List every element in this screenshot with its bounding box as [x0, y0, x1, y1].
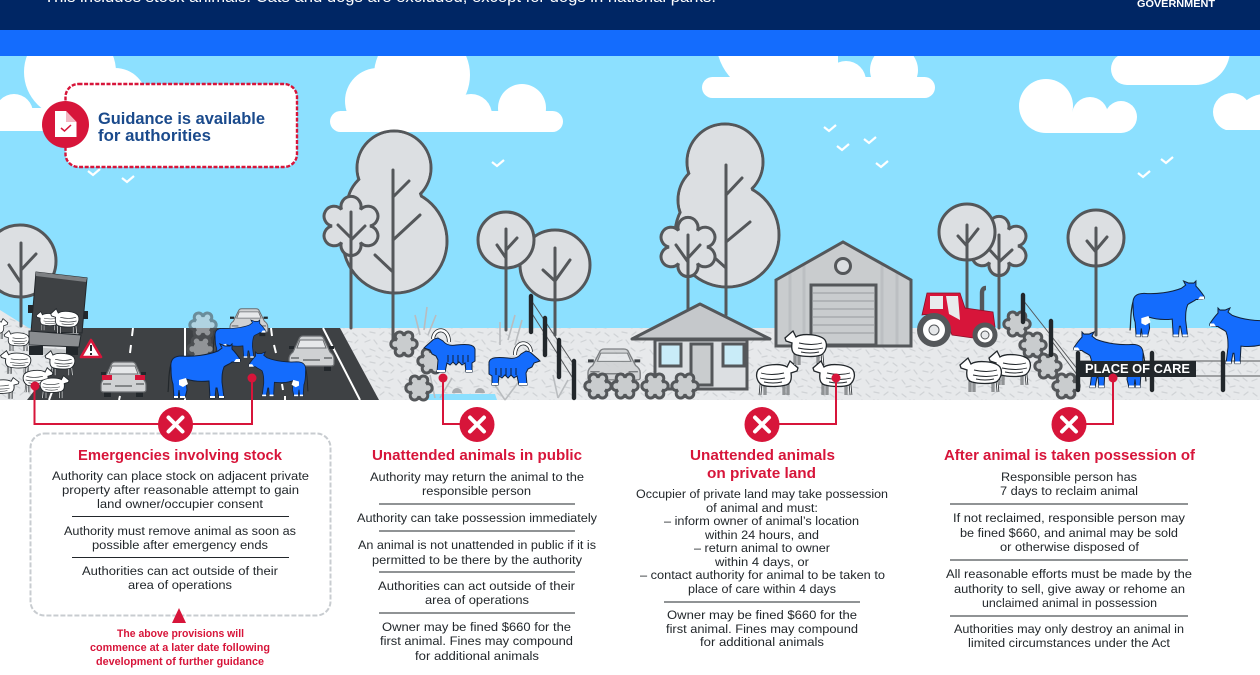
body text: Owner may be fined $660 for the: [667, 608, 857, 622]
body text: Authorities may only destroy an animal in: [954, 622, 1184, 636]
body text: [52, 469, 309, 592]
tree: large left: [343, 131, 447, 345]
body text: unclaimed animal in possession: [982, 596, 1157, 610]
body text: for additional animals: [700, 635, 824, 649]
icon: document with tick: [42, 101, 89, 148]
body text: area of operations: [425, 593, 529, 607]
road: [27, 328, 379, 400]
header band: [0, 0, 1260, 30]
car behind house: [588, 349, 640, 385]
body text: or otherwise disposed of: [1000, 540, 1140, 554]
blue stripe: [0, 30, 1260, 56]
panel: after animal is taken possession of: [944, 447, 1196, 650]
body text: – contact authority for animal to be taken to: [640, 568, 885, 582]
blue goats: [424, 330, 540, 385]
blue cows right: [1074, 281, 1260, 388]
heading: Unattended animals in public: [372, 447, 582, 464]
body text: of animal and must:: [706, 501, 818, 515]
callout text: Guidance is available: [98, 110, 265, 128]
barn: [776, 242, 911, 346]
body text: place of care within 4 days: [688, 582, 836, 596]
house: [632, 304, 770, 389]
note: commencement: commence at a later date following: [90, 642, 270, 654]
sheep near house and barn: [757, 331, 1030, 395]
heading: on private land: [707, 465, 816, 482]
body text: An animal is not unattended in public if it is: [358, 538, 596, 552]
shrubs: [391, 312, 1079, 400]
callout text: [98, 110, 265, 145]
panel: unattended animals in public: [357, 447, 598, 663]
grass and pond: [415, 307, 568, 400]
body text: Authorities can act outside of their: [378, 579, 575, 593]
note: commencement: The above provisions will: [117, 628, 244, 640]
body text: within 4 days, or: [714, 555, 809, 569]
body text: [357, 470, 598, 663]
body text: limited circumstances under the Act: [968, 636, 1171, 650]
arrow: up to panel: [172, 608, 186, 623]
warning triangle: [81, 340, 101, 357]
cloud: top right: [1111, 15, 1230, 85]
body text: Authority can take possession immediately: [357, 511, 598, 525]
body text: Authority can place stock on adjacent private: [52, 469, 309, 483]
connector 1: emergencies: [30, 374, 256, 442]
tractor: [920, 288, 995, 345]
trees: [0, 124, 1124, 345]
connector 3: private land: [744, 374, 840, 442]
body text: [636, 487, 888, 649]
body text: first animal. Fines may compound: [380, 634, 573, 648]
body text: – inform owner of animal’s location: [664, 514, 859, 528]
body text: Responsible person has: [1001, 470, 1137, 484]
tree: large centre: [675, 124, 779, 315]
note: commencement: development of further guidance: [96, 656, 264, 668]
tree: far left: [0, 225, 56, 326]
body text: Occupier of private land may take possession: [636, 487, 888, 501]
heading: Emergencies involving stock: [78, 447, 283, 464]
heading: [690, 447, 835, 482]
connector 2: public: [438, 374, 494, 442]
panel: unattended animals on private land: [636, 447, 888, 649]
body text: Authority may return the animal to the: [370, 470, 584, 484]
connector 4: possession: [1052, 374, 1118, 442]
body text: land owner/occupier consent: [97, 497, 264, 511]
tree: right group: [939, 204, 1124, 335]
callout text: for authorities: [98, 127, 211, 145]
body text: for additional animals: [415, 649, 539, 663]
body text: All reasonable efforts must be made by the: [946, 567, 1192, 581]
body text: first animal. Fines may compound: [666, 622, 858, 636]
body text: within 24 hours, and: [704, 528, 819, 542]
body text: If not reclaimed, responsible person may: [953, 511, 1186, 525]
tree: small cloud centre: [661, 217, 715, 310]
heading: Unattended animals: [690, 447, 835, 464]
body text: 7 days to reclaim animal: [1000, 484, 1138, 498]
sky: [0, 56, 1260, 328]
body text: area of operations: [128, 578, 232, 592]
sheep flock on left: [0, 319, 75, 399]
body text: property after reasonable attempt to gain: [62, 483, 299, 497]
place of care sign: PLACE OF CARE: [1085, 362, 1190, 376]
tree: small cloud left: [324, 196, 378, 328]
body text: responsible person: [422, 484, 531, 498]
heading: After animal is taken possession of: [944, 447, 1196, 464]
callout: guidance available: [42, 84, 297, 167]
body text: possible after emergency ends: [92, 538, 268, 552]
ground: [0, 328, 1260, 400]
panel: emergencies involving stock: [30, 434, 330, 616]
tree: round pair: [478, 212, 590, 335]
median shrubs: [188, 313, 216, 361]
cloud: right: [1019, 79, 1137, 133]
blue cows on road: [168, 320, 308, 398]
body text: Authorities can act outside of their: [82, 564, 278, 578]
cloud: far right: [1213, 93, 1260, 130]
fences: [531, 295, 1260, 398]
body text: [946, 470, 1192, 650]
body text: permitted to be there by the authority: [372, 553, 583, 567]
body text: authority to sell, give away or rehome an: [954, 582, 1185, 596]
body text: Owner may be fined $660 for the: [382, 620, 571, 634]
cloud: centre left: [330, 56, 563, 132]
truck with sheep: [28, 272, 88, 356]
cloud: top centre: [702, 56, 935, 98]
clouds: [0, 0, 1260, 154]
body text: – return animal to owner: [694, 541, 830, 555]
cars on road: [101, 309, 334, 397]
cloud: top left: [0, 56, 142, 131]
note: commencement: [90, 628, 270, 668]
body text: be fined $660, and animal may be sold: [960, 526, 1178, 540]
body text: Authority must remove animal as soon as: [64, 524, 296, 538]
birds: [88, 125, 1173, 182]
